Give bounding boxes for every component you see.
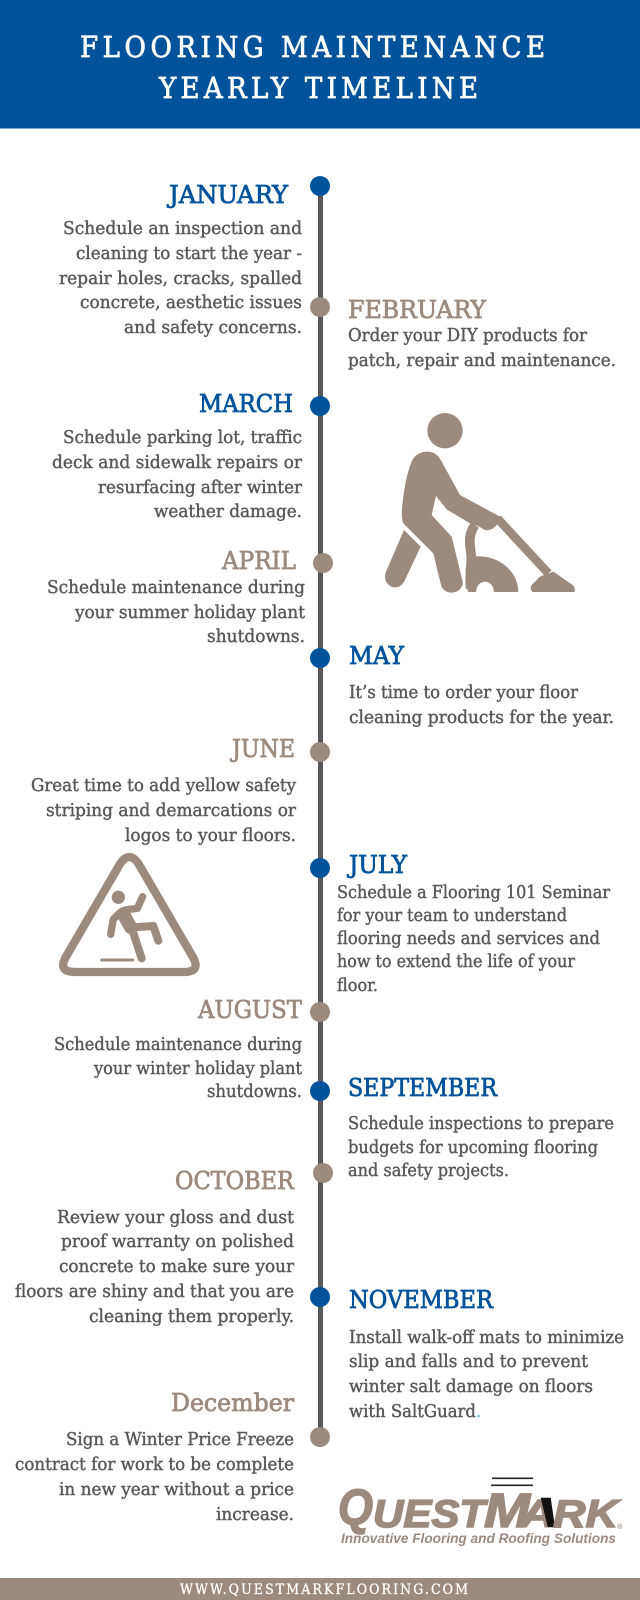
- panel: october: Review your gloss and dust: [57, 1207, 295, 1228]
- panel: september: Schedule inspections to prepare: [348, 1113, 614, 1134]
- panel: july: how to extend the life of your: [337, 951, 575, 972]
- panel: december: in new year without a price: [59, 1479, 294, 1500]
- panel: september: SEPTEMBER: [348, 1074, 498, 1102]
- panel: january: [59, 181, 302, 338]
- panel: december: contract for work to be complete: [15, 1454, 294, 1475]
- panel: november: Install walk-off mats to minimize: [349, 1327, 624, 1348]
- panel: may: [349, 642, 614, 728]
- logo: QuestMark: [338, 1478, 623, 1546]
- logo: QuestMark: Innovative Flooring and Roofing Solutions: [341, 1530, 616, 1546]
- title: FLOORING MAINTENANCE: [80, 30, 545, 64]
- panel: march: weather damage.: [154, 501, 302, 522]
- website url: WWW.QUESTMARKFLOORING.COM: [180, 1582, 468, 1598]
- panel: august: shutdowns.: [207, 1081, 302, 1102]
- panel: july: floor.: [337, 975, 378, 996]
- panel: november: [349, 1286, 624, 1422]
- panel: january: JANUARY: [167, 181, 289, 209]
- panel: july: Schedule a Flooring 101 Seminar: [337, 882, 610, 903]
- panel: april: your summer holiday plant: [74, 602, 306, 623]
- panel: october: concrete to make sure your: [59, 1256, 294, 1277]
- panel: january: repair holes, cracks, spalled: [59, 268, 302, 289]
- panel: november: .: [476, 1401, 481, 1422]
- logo: QuestMark: RK: [553, 1493, 621, 1536]
- panel: april: shutdowns.: [207, 626, 305, 647]
- panel: february: patch, repair and maintenance.: [348, 350, 616, 371]
- panel: july: for your team to understand: [337, 905, 567, 926]
- footer band: [0, 1578, 640, 1600]
- panel: july: [337, 851, 610, 996]
- panel: march: deck and sidewalk repairs or: [52, 452, 302, 473]
- icon: wet floor warning sign: [63, 857, 196, 972]
- timeline with month markers: [310, 176, 333, 1447]
- panel: june: logos to your floors.: [125, 825, 296, 846]
- panel: september: [348, 1074, 614, 1181]
- panel: may: MAY: [349, 642, 405, 670]
- logo: QuestMark: UEST: [373, 1493, 488, 1536]
- panel: february: Order your DIY products for: [348, 325, 587, 346]
- panel: august: [54, 996, 303, 1102]
- header band: [0, 0, 640, 128]
- panel: january: cleaning to start the year -: [76, 243, 302, 264]
- panel: september: and safety projects.: [348, 1160, 509, 1181]
- panel: august: Schedule maintenance during: [54, 1034, 302, 1055]
- panel: july: JULY: [347, 851, 408, 879]
- logo: QuestMark: Q: [338, 1479, 373, 1535]
- panel: september: budgets for upcoming flooring: [348, 1137, 598, 1158]
- panel: november: with SaltGuard: [349, 1401, 476, 1422]
- panel: october: floors are shiny and that you are: [15, 1281, 294, 1302]
- title: YEARLY TIMELINE: [158, 71, 478, 105]
- panel: august: AUGUST: [197, 996, 303, 1024]
- panel: february: [348, 296, 616, 371]
- panel: november: slip and falls and to prevent: [349, 1351, 589, 1372]
- panel: june: striping and demarcations or: [46, 800, 296, 821]
- panel: january: concrete, aesthetic issues: [80, 292, 302, 313]
- panel: january: Schedule an inspection and: [63, 218, 302, 239]
- panel: may: It’s time to order your floor: [349, 682, 578, 703]
- title: [80, 30, 545, 105]
- panel: october: cleaning them properly.: [89, 1306, 294, 1327]
- panel: october: proof warranty on polished: [61, 1231, 294, 1252]
- panel: march: Schedule parking lot, traffic: [63, 427, 302, 448]
- logo: QuestMark: ®: [617, 1523, 623, 1531]
- panel: june: JUNE: [230, 735, 295, 763]
- panel: december: Sign a Winter Price Freeze: [66, 1429, 294, 1450]
- panel: october: OCTOBER: [175, 1167, 295, 1195]
- panel: august: your winter holiday plant: [93, 1058, 302, 1079]
- panel: december: December: [171, 1389, 295, 1417]
- panel: april: Schedule maintenance during: [47, 577, 305, 598]
- panel: november: NOVEMBER: [349, 1286, 494, 1314]
- panel: june: [31, 735, 297, 846]
- panel: may: cleaning products for the year.: [349, 707, 614, 728]
- icon: person vacuuming: [385, 413, 575, 593]
- panel: april: [47, 547, 306, 647]
- panel: february: FEBRUARY: [348, 296, 487, 324]
- panel: january: and safety concerns.: [124, 317, 302, 338]
- panel: october: [15, 1167, 295, 1327]
- panel: july: flooring needs and services and: [337, 928, 600, 949]
- panel: november: winter salt damage on floors: [349, 1376, 593, 1397]
- logo: QuestMark: M: [484, 1485, 531, 1538]
- panel: december: [15, 1389, 295, 1525]
- panel: march: MARCH: [199, 390, 293, 418]
- panel: april: APRIL: [221, 547, 296, 575]
- logo: QuestMark: A: [519, 1493, 556, 1536]
- panel: march: [52, 390, 302, 522]
- panel: june: Great time to add yellow safety: [31, 775, 297, 796]
- panel: march: resurfacing after winter: [98, 477, 302, 498]
- panel: december: increase.: [216, 1504, 294, 1525]
